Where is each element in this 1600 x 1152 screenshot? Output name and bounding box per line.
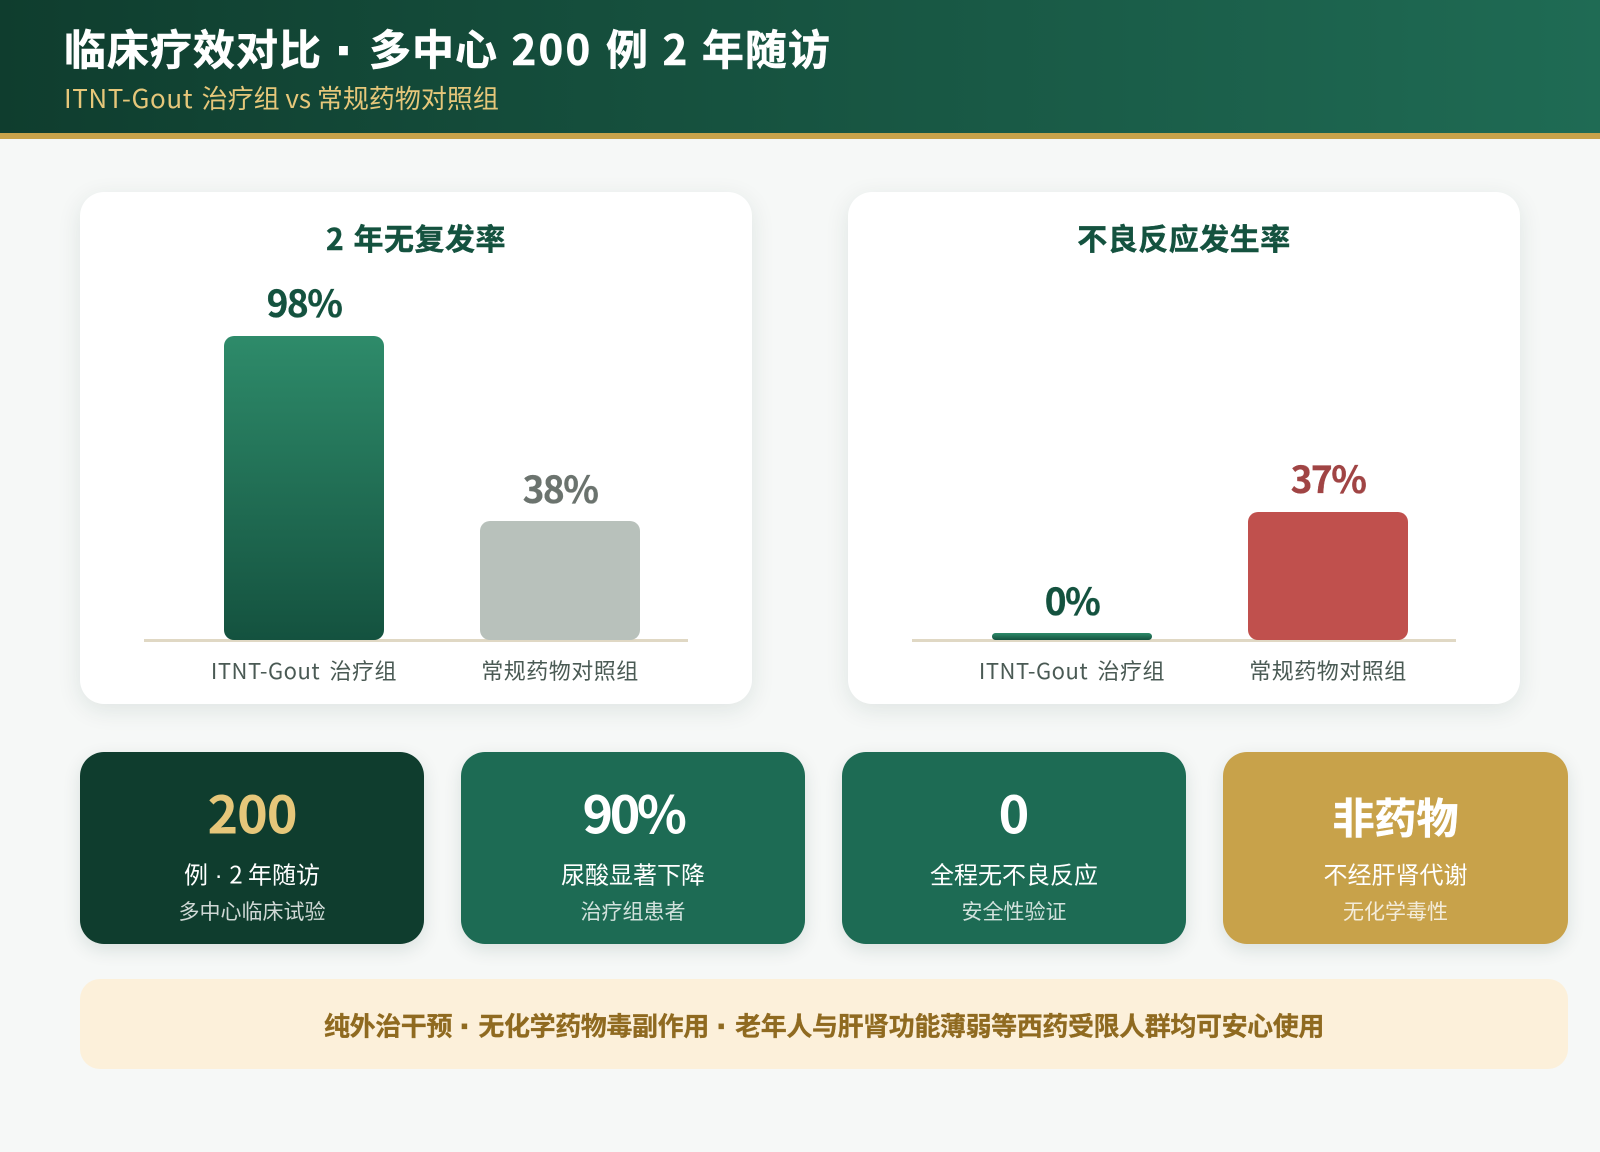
title: 临床疗效对比 · 多中心 200 例 2 年随访 bbox=[64, 17, 831, 83]
bar: treatment 0% bbox=[992, 633, 1152, 640]
number: 非药物 bbox=[1332, 786, 1459, 846]
stat card: 200 cases bbox=[80, 752, 424, 944]
label: 例 · 2 年随访 bbox=[184, 856, 320, 890]
bar: treatment 98% bbox=[224, 336, 384, 640]
sublabel: 安全性验证 bbox=[962, 896, 1066, 926]
number: 0 bbox=[999, 774, 1029, 848]
label: treatment group: ITNT-Gout 治疗组 bbox=[211, 654, 397, 686]
sublabel: 多中心临床试验 bbox=[178, 896, 326, 926]
axis line bbox=[912, 639, 1456, 642]
label: treatment group: ITNT-Gout 治疗组 bbox=[979, 654, 1165, 686]
panel: 2-year recurrence-free rate bbox=[80, 192, 752, 704]
number: 90% bbox=[583, 774, 683, 848]
subtitle: ITNT-Gout 治疗组 vs 常规药物对照组 bbox=[64, 79, 499, 116]
label: 尿酸显著下降 bbox=[561, 856, 705, 890]
panel: adverse reaction rate bbox=[848, 192, 1520, 704]
chart heading: 2 年无复发率 bbox=[326, 215, 506, 259]
header banner bbox=[0, 0, 1600, 139]
value: 0%: 0% bbox=[1045, 572, 1099, 626]
label: 全程无不良反应 bbox=[930, 856, 1098, 890]
sublabel: 无化学毒性 bbox=[1343, 896, 1448, 926]
chart heading: 不良反应发生率 bbox=[1077, 215, 1291, 259]
label: control group: 常规药物对照组 bbox=[481, 654, 639, 686]
stat card: 0 bbox=[842, 752, 1186, 944]
label: 不经肝肾代谢 bbox=[1324, 856, 1468, 890]
callout banner bbox=[80, 979, 1568, 1069]
value: 38%: 38% bbox=[523, 460, 597, 514]
value: 37%: 37% bbox=[1291, 450, 1365, 504]
axis line bbox=[144, 639, 688, 642]
stat card: 90% bbox=[461, 752, 805, 944]
value: 98%: 98% bbox=[267, 274, 341, 328]
stat card: non-drug bbox=[1223, 752, 1568, 944]
callout text: 纯外治干预 · 无化学药物毒副作用 · 老年人与肝肾功能薄弱等西药受限人群均可安心使用 bbox=[324, 1006, 1324, 1046]
number: 200 bbox=[207, 774, 297, 848]
label: control group: 常规药物对照组 bbox=[1249, 654, 1407, 686]
bar: control 38% bbox=[480, 521, 640, 640]
bar: control 37% bbox=[1248, 512, 1408, 640]
sublabel: 治疗组患者 bbox=[580, 896, 686, 926]
